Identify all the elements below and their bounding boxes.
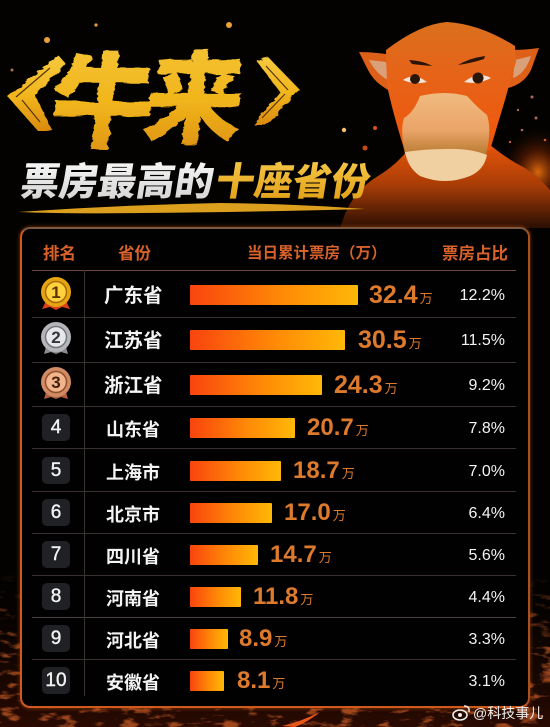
value: 32.4万: 32.4万 <box>369 281 433 309</box>
province: 河南省: 河南省 <box>106 589 160 609</box>
row 5: 上海市 <box>42 457 505 484</box>
rank badge 8: 8 <box>51 586 61 607</box>
row 1: 广东省 <box>41 277 505 310</box>
value: 18.7万: 18.7万 <box>293 457 355 484</box>
bar: 24.3 <box>190 375 322 395</box>
row 2: 江苏省 <box>41 322 505 354</box>
bar: 14.7 <box>190 545 258 565</box>
icon: silver medal 2 <box>41 322 71 354</box>
bar: 8.1 <box>190 671 224 691</box>
province: 四川省: 四川省 <box>106 547 160 567</box>
subtitle: 票房最高的十座省份: 十座省份 <box>212 151 375 207</box>
icon: gold medal 1: 1 <box>51 283 61 302</box>
bar: 20.7 <box>190 418 295 438</box>
bar: 18.7 <box>190 461 281 481</box>
icon: weibo logo <box>452 705 470 721</box>
column header: 票房占比: 票房占比 <box>442 245 508 263</box>
icon: bronze medal 3: 3 <box>51 373 61 392</box>
icon: silver medal 2: 2 <box>51 328 61 347</box>
value: 24.3万: 24.3万 <box>334 371 398 399</box>
value: 8.9万: 8.9万 <box>239 625 287 652</box>
icon: bronze medal 3 <box>41 367 71 399</box>
bull head <box>386 22 516 152</box>
value: 17.0万: 17.0万 <box>284 499 346 526</box>
row 4: 山东省 <box>42 414 505 441</box>
bull body <box>340 143 550 228</box>
value: 20.7万: 20.7万 <box>307 414 369 441</box>
column header: 省份: 省份 <box>118 245 151 263</box>
province: 河北省: 河北省 <box>106 631 160 651</box>
rank badge 5: 5 <box>51 460 61 481</box>
province: 江苏省: 江苏省 <box>104 330 163 352</box>
rank badge 6: 6 <box>51 502 61 523</box>
province: 山东省: 山东省 <box>106 420 160 440</box>
share: 11.5%: 11.5% <box>461 332 505 349</box>
rank badge 8 <box>42 583 70 610</box>
title: 《牛来》 brush lettering: 来 <box>137 19 255 164</box>
share: 6.4%: 6.4% <box>469 505 505 522</box>
share: 4.4%: 4.4% <box>469 589 505 606</box>
value: 11.8万: 11.8万 <box>253 583 313 610</box>
province: 广东省: 广东省 <box>104 285 163 307</box>
bar: 32.4 <box>190 285 358 305</box>
title: 《牛来》 brush lettering <box>7 19 300 170</box>
share: 7.8%: 7.8% <box>469 420 505 437</box>
share: 3.1%: 3.1% <box>469 673 505 690</box>
value: 30.5万: 30.5万 <box>358 326 422 354</box>
row 7: 四川省 <box>42 541 505 568</box>
share: 12.2%: 12.2% <box>460 287 505 304</box>
value: 8.1万: 8.1万 <box>237 667 285 694</box>
row 8: 河南省 <box>42 583 505 610</box>
province: 安徽省: 安徽省 <box>106 673 160 693</box>
column header: 排名: 排名 <box>43 245 76 263</box>
share: 3.3%: 3.3% <box>469 631 505 648</box>
rank badge 7: 7 <box>51 544 61 565</box>
subtitle brush underline <box>18 203 364 214</box>
watermark: @科技事儿 <box>452 705 543 721</box>
bar: 11.8 <box>190 587 241 607</box>
bull brows and eyes <box>409 56 485 66</box>
subtitle: 票房最高的十座省份: 票房最高的 <box>17 151 219 207</box>
rank badge 7 <box>42 541 70 568</box>
rank badge 10 <box>42 667 70 694</box>
bar: 8.9 <box>190 629 228 649</box>
row 9: 河北省 <box>42 625 505 652</box>
bull ears <box>359 48 539 92</box>
panel: province ranking table <box>20 227 530 708</box>
rank badge 9 <box>42 625 70 652</box>
watermark text: @科技事儿 <box>473 705 543 721</box>
rank badge 9: 9 <box>51 628 61 649</box>
province: 浙江省: 浙江省 <box>104 375 163 397</box>
icon: gold medal 1 <box>41 277 71 310</box>
bull muzzle <box>402 93 489 155</box>
share: 5.6%: 5.6% <box>469 547 505 564</box>
rank badge 10: 10 <box>45 670 67 691</box>
bull chin <box>405 149 487 181</box>
row 6: 北京市 <box>42 499 505 526</box>
value: 14.7万: 14.7万 <box>270 541 332 568</box>
bar: 30.5 <box>190 330 345 350</box>
province: 上海市: 上海市 <box>106 463 160 483</box>
column header: 当日累计票房（万）: 当日累计票房（万） <box>247 245 387 262</box>
share: 7.0%: 7.0% <box>469 463 505 480</box>
rank badge 4 <box>42 414 70 441</box>
bar: 17.0 <box>190 503 272 523</box>
share: 9.2%: 9.2% <box>469 377 505 394</box>
subtitle: 票房最高的十座省份 <box>17 151 375 207</box>
rank badge 6 <box>42 499 70 526</box>
rank badge 5 <box>42 457 70 484</box>
row 10: 安徽省 <box>42 667 505 694</box>
rank badge 4: 4 <box>51 417 61 438</box>
title: 《牛来》 brush lettering: 牛 <box>43 20 165 170</box>
bull mascot <box>340 22 550 228</box>
province: 北京市: 北京市 <box>106 505 160 525</box>
row 3: 浙江省 <box>41 367 505 399</box>
